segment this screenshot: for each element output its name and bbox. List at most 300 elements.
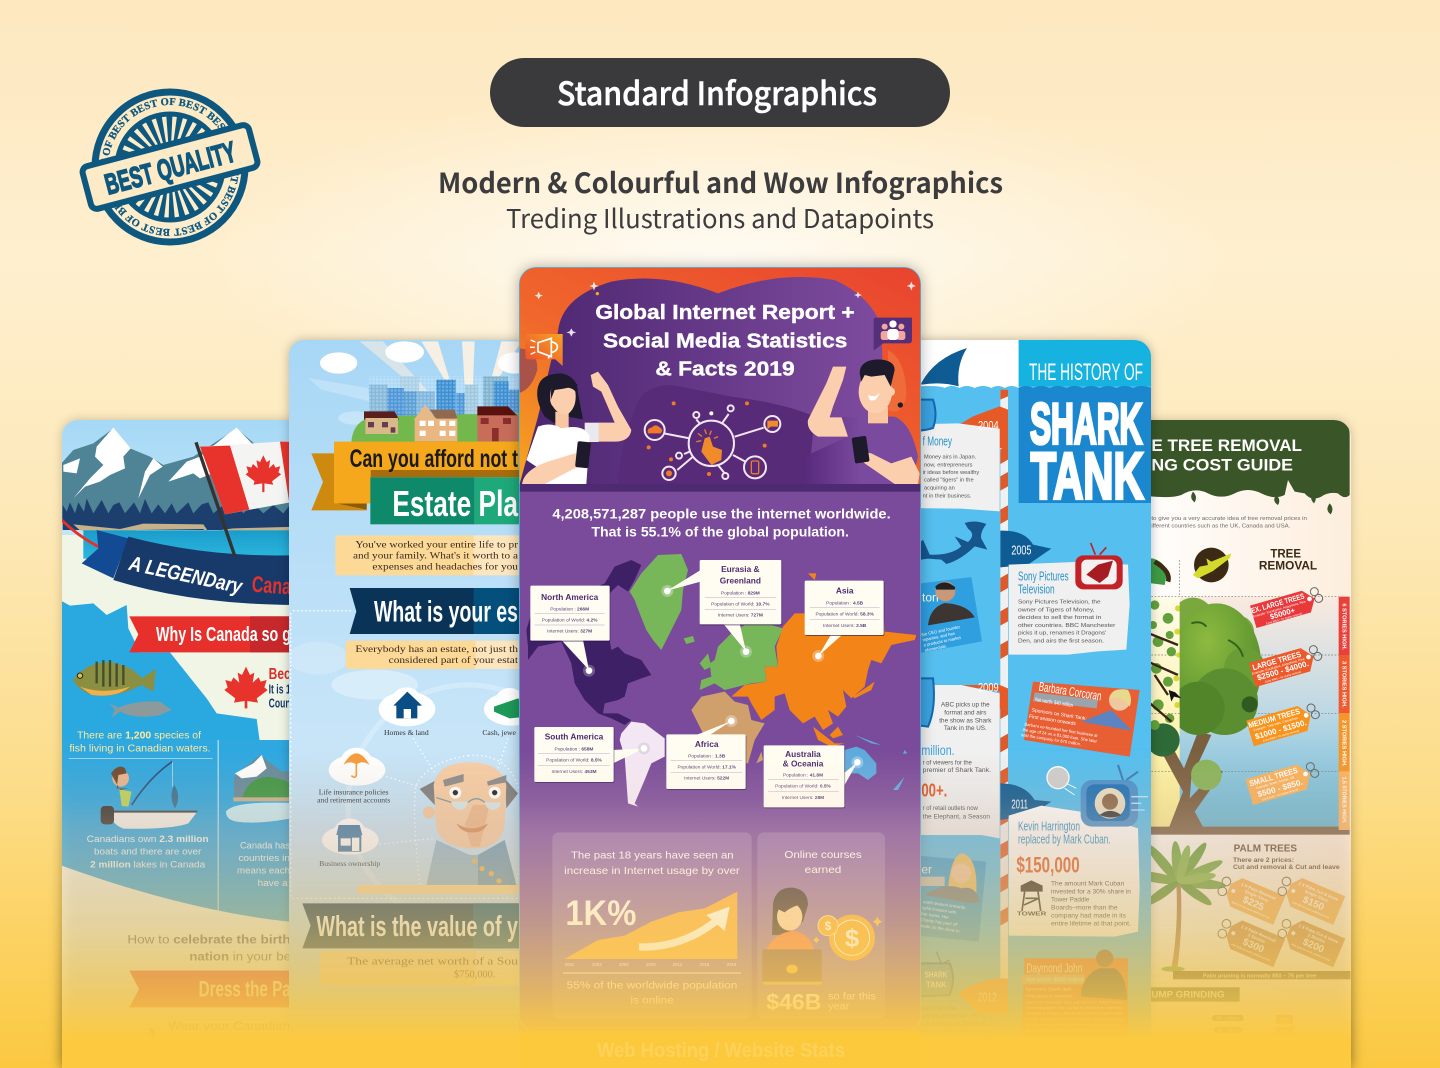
water lower section — [60, 740, 300, 923]
price tag: palm 300: 1 X Palm Removal — [1240, 924, 1277, 943]
text: intro: to give you a very accurate idea of tree removal prices in — [1151, 516, 1307, 522]
price tag: palm 200: 2 Stories — [1307, 932, 1326, 944]
text: palm trees heading: Cut and removal & Cut and leave — [1233, 864, 1340, 871]
text: countries: countries in — [238, 853, 290, 863]
callout: australia and oceania: Population of World: 0.5% — [775, 784, 832, 790]
text: internet users: 4,208,571,287 people use the internet worldwide. — [552, 506, 891, 521]
panel: online courses: earned — [805, 865, 842, 876]
text: species: There are 1,200 species of — [77, 730, 201, 741]
milestone: 2012: ed for a Primetime Emmy — [922, 1030, 992, 1036]
card: lara profile — [911, 853, 986, 942]
sky and mountains — [60, 415, 300, 559]
icon: people badge — [874, 318, 912, 351]
text box: intro: expenses and headaches for you — [372, 561, 518, 572]
milestone: 2005: Sony Pictures Television, the — [1018, 599, 1101, 605]
text: because: Coun — [269, 697, 291, 711]
milestone: 2009: r of viewers for the — [923, 760, 973, 766]
price tag: palm 200 — [1274, 914, 1345, 967]
ribbon: estate planning — [370, 477, 528, 524]
milestone: 2011: The amount Mark Cuban — [1051, 882, 1124, 888]
price tag: palm 225 — [1214, 871, 1285, 925]
price tag: extra large trees: Example: Eucalyptus, Angophora, Pine — [1253, 599, 1306, 618]
text box: net worth — [320, 951, 529, 985]
icon: umbrella — [329, 748, 385, 786]
chart: area growth: 2006 — [619, 962, 629, 967]
milestone: 2009: Tank in the US. — [944, 725, 987, 732]
milestone: 2005: other countries. BBC Manchester — [1018, 623, 1115, 629]
diagram: network of icons — [645, 401, 780, 480]
heading: stump grinding — [1138, 987, 1240, 1002]
text: boats: boats and there are over — [94, 846, 201, 856]
milestone: 2009 — [898, 678, 1008, 838]
milestone: 2004: 2004 — [978, 418, 999, 432]
milestone: 2012 — [911, 952, 1008, 1068]
title — [595, 302, 855, 381]
milestone: 2005: 2005 — [1011, 544, 1031, 558]
milestone: 2009: ABC picks up the — [941, 701, 990, 708]
icon: business ownership: Business ownership — [319, 859, 380, 868]
houses — [364, 405, 519, 441]
text: celebrate: How to celebrate the birth — [127, 932, 291, 946]
text: palm trees heading: PALM TREES — [1234, 844, 1298, 855]
panel: online courses: Online courses — [784, 850, 862, 861]
panel: global internet report (center) — [62, 267, 1351, 1068]
callout: australia and oceania: & Oceania — [783, 759, 824, 769]
card: barbara corcoran: Sponsors on Shark Tank: — [1031, 707, 1087, 722]
callout: africa: Internet Users: 522M — [684, 776, 729, 782]
text: celebrate: nation in your be — [189, 950, 291, 964]
milestone: 2005: owner of Tigers of Money, — [1018, 607, 1095, 613]
note: palm pruning: felt. — [1153, 973, 1162, 979]
price tag: palm 150: Add $80 for each additional tree — [1291, 900, 1330, 920]
ribbon: what is the value: What is the value of y — [316, 911, 518, 943]
badge: best quality stamp: BEST QUALITY — [102, 136, 239, 202]
card: barbara corcoran: sold the company for $70 million. — [1021, 732, 1082, 747]
price tag: large trees: Extra $450 + for stump removal — [1265, 670, 1302, 684]
card: daymond john — [1021, 950, 1128, 1035]
text box: everybody has an estate — [346, 641, 528, 669]
card: barbara corcoran: Barbara Corcoran — [1038, 680, 1102, 703]
card: lara profile: ourth season onwards — [923, 899, 966, 910]
text box: everybody has an estate: Everybody has an estate, not just th — [355, 645, 518, 655]
green hill — [351, 413, 521, 443]
callout: north america: Population of World: 4.2% — [542, 617, 598, 623]
illustration: man waving — [803, 359, 920, 484]
price tag: palm 300 — [1214, 914, 1285, 967]
callout: africa: Population : 1.3B — [688, 754, 726, 760]
price tag: medium trees: Example: Tulip oaks, Casuarinas — [1253, 716, 1299, 732]
panel: internet usage growth: The past 18 years have seen an — [571, 851, 734, 862]
legend strip: stories high: 6 STORIES HIGH. — [1340, 603, 1346, 650]
icon: megaphone badge — [525, 334, 563, 366]
price tag: extra large trees: Extra $600 + for stump removal — [1265, 611, 1303, 625]
callout: australia and oceania: Population : 41.8M — [783, 773, 823, 779]
price tag: large trees: $2500 - $4000. — [1256, 659, 1310, 682]
price tag: small trees: SMALL TREES — [1248, 766, 1299, 788]
price tag: palm 225: $225 — [1241, 894, 1266, 913]
card: barbara corcoran: the age of 24 on a $1,000 loan. She later — [1022, 727, 1098, 744]
legend strip: stories high: 1.5 STORIES HIGH. — [1340, 777, 1346, 824]
icon: homes and land — [379, 687, 435, 737]
card: barbara corcoran: First season onwards — [1029, 714, 1077, 727]
banner: a legendary canada — [82, 530, 300, 605]
chart: stump price rows: $450 — [1280, 1017, 1290, 1022]
section band: web hosting stats: Web Hosting / Website Stats — [597, 1040, 845, 1062]
card: daymond john: made by him and his mother. It became a — [1025, 1017, 1123, 1021]
banner: a legendary canada: A LEGENDary — [126, 552, 245, 599]
card: kevin profile: mpanies, and has — [922, 631, 955, 642]
ribbon: why is canada so great — [129, 616, 300, 652]
card: daymond john: company FUBU, which sold hand-sewn hats — [1025, 1012, 1122, 1016]
icon: red tv — [1075, 543, 1123, 589]
price tag: palm 225: Single Story — [1244, 889, 1270, 903]
panel: Canada infographic (left) — [60, 415, 302, 1068]
milestone: 2011: replaced by Mark Cuban. — [1018, 831, 1111, 846]
header base band — [518, 484, 928, 492]
milestone: 2005: Television — [1018, 582, 1055, 596]
title: the history of shark tank — [1019, 338, 1151, 512]
milestone: 2009: format and airs — [944, 709, 986, 716]
illustration: woman with laptop — [762, 888, 822, 985]
milestone: 2012: TANK — [926, 980, 947, 990]
chart: stump price rows: 85 – 100cm — [1217, 1016, 1240, 1021]
chart: stump price rows: $150 — [1280, 1053, 1290, 1058]
price tag: medium trees: $1000 - $1500. — [1254, 718, 1308, 741]
title pill — [490, 58, 950, 127]
milestone: 2004: acquiring an — [924, 485, 955, 491]
stat: 46 billion: year — [828, 1001, 850, 1012]
callout: australia and oceania: Australia — [785, 749, 821, 759]
milestone: 2011 — [1000, 783, 1140, 937]
price tag: palm 300: Add $150 for each additional tree — [1231, 942, 1271, 962]
text: life insurance — [317, 789, 390, 802]
title: the history of shark tank: THE HISTORY OF — [1029, 359, 1143, 386]
card: daymond john: He mortgaged his house to fund the clothing — [1025, 1006, 1122, 1010]
card: daymond john: First season onwards — [1025, 993, 1073, 999]
icon: maple leaf — [224, 667, 268, 708]
milestone: 2005: decides to sell the format in — [1018, 615, 1101, 621]
illustration: big tree — [1138, 598, 1350, 835]
milestone: 2004: ir ideas before wealthy — [923, 470, 979, 476]
milestone: 2009: the show as Shark — [939, 717, 992, 724]
milestone: 2012: becomes the — [922, 1006, 957, 1012]
milestone: 2004: nt in their business. — [923, 493, 972, 499]
callout: eurasia and greenland — [661, 560, 781, 658]
card: barbara corcoran — [1021, 678, 1140, 757]
price tag: large trees: Example: Eucalyptus, Angophora, Pine — [1251, 657, 1305, 676]
callout: eurasia and greenland: Eurasia & — [721, 564, 760, 574]
callout: south america: South America — [545, 732, 604, 742]
card: daymond john: multi-million dollar success from the very start — [1025, 1023, 1123, 1027]
text box: net worth: $750,000. — [454, 969, 495, 980]
price tag: large trees — [1249, 643, 1325, 687]
legend strip: stories high: 3 STORIES HIGH. — [1340, 661, 1346, 708]
callout: asia: Population : 4.5B — [826, 601, 864, 607]
icon: hangers — [118, 1029, 237, 1068]
chart: area growth: 2018 — [727, 962, 737, 967]
milestone: 2011: Boards–more than the — [1051, 906, 1118, 912]
milestone: 2004 — [898, 400, 1008, 511]
title: & Facts 2019 — [655, 359, 795, 381]
callout: africa: Africa — [695, 739, 719, 749]
price tag: palm 225: 1 X Palm Removal — [1240, 882, 1277, 901]
milestone: 2011: $150,000 — [1016, 852, 1080, 877]
legend strip: stories high — [1339, 597, 1350, 830]
price tag: palm 150 — [1274, 871, 1345, 925]
callout: north america: North America — [541, 592, 599, 602]
icon: island — [226, 755, 289, 823]
ribbon: what is the value — [302, 903, 528, 948]
text: because — [269, 668, 289, 708]
callout: asia — [805, 581, 884, 662]
callout: south america: Population : 658M — [555, 747, 593, 753]
price tag: medium trees — [1246, 701, 1323, 746]
icon: business ownership — [319, 818, 380, 868]
illustration: woman waving — [522, 372, 631, 484]
stat: 46 billion: $46B — [766, 990, 821, 1015]
card: barbara corcoran: Barbara co-founded her first business at — [1024, 722, 1099, 738]
milestone: 2011: entire lifetime at that point. — [1051, 922, 1131, 928]
panel: internet usage growth — [552, 832, 752, 1019]
price tag: palm 150: $150 — [1301, 894, 1326, 913]
icon: cash and jewellery: Cash, jewe — [482, 728, 517, 737]
header background — [518, 267, 928, 485]
text: boats: 2 million lakes in Canada — [90, 860, 205, 870]
callout: asia: Asia — [836, 586, 854, 596]
milestone: 2011: company had made in its — [1051, 914, 1126, 920]
card: barbara corcoran: Net worth: $40 million — [1035, 697, 1073, 709]
text: palm trees heading: There are 2 prices: — [1233, 857, 1294, 864]
milestone: 2004: f Money — [923, 434, 952, 448]
panel: internet usage growth: 55% of the worldwide population — [567, 980, 738, 991]
chart: stump price rows — [1212, 1015, 1293, 1060]
price tag: palm 200: Add $100 for each additional tree — [1291, 942, 1331, 962]
legend strip: stories high: 2 STORIES HIGH. — [1340, 720, 1346, 767]
card: kevin profile — [911, 577, 982, 655]
price tag: small trees: Example: Bottle, Acacia, Lilli — [1256, 775, 1295, 790]
milestone: 2009: million. — [921, 742, 955, 758]
icon: fisherman on boat — [101, 761, 197, 829]
milestone: 2011: Tower Paddle — [1051, 898, 1090, 904]
milestone: 2009: premier of Shark Tank. — [923, 768, 991, 774]
milestone: 2004: called "tigers" in the — [924, 478, 974, 484]
callout: eurasia and greenland: Population : 829M — [721, 590, 760, 596]
world map — [526, 554, 916, 807]
price tag: palm 150: 1 X Palm Cut & leave — [1298, 881, 1340, 902]
city skyline — [369, 376, 521, 418]
card: kevin profile: the CEO and founder — [921, 624, 961, 637]
icon: hammerhead shark — [911, 522, 987, 564]
price tag: medium trees: MEDIUM TREES — [1247, 707, 1302, 730]
timeline pole — [1000, 390, 1008, 990]
milestone: 2011: 2011 — [1011, 797, 1028, 811]
price tag: small trees — [1246, 759, 1322, 805]
price tag: palm 200: 1 X Palm Cut & leave — [1298, 923, 1340, 945]
text: internet users: That is 55.1% of the global population. — [591, 525, 849, 540]
section band: web hosting stats — [519, 1032, 921, 1068]
chart: area growth: 2009 — [646, 962, 656, 967]
text: intro — [1151, 516, 1307, 530]
callout: australia and oceania: Internet Users: 28M — [782, 795, 824, 801]
text: tree removal — [1259, 548, 1317, 572]
callout: north america: Population : 266M — [550, 607, 589, 613]
price tag: palm 300: $300 — [1241, 937, 1266, 956]
milestone: 2005: Den, and airs the first season. — [1018, 638, 1104, 644]
ribbon: what is your estate: What is your es — [374, 595, 518, 628]
icon: dollar coins: $ — [825, 919, 832, 933]
card: daymond john: and moved from his house to Seoul. — [1025, 1029, 1122, 1033]
price tag: extra large trees — [1250, 586, 1326, 628]
ribbon: what is your estate — [350, 588, 528, 634]
card: daymond john: Net worth: $250 million — [1026, 978, 1084, 984]
callout: north america: Internet Users: 327M — [547, 628, 592, 634]
note: palm pruning: Palm pruning is normally $50 – 75 per tree — [1203, 973, 1316, 979]
icon: blue tv with portrait — [1047, 765, 1148, 827]
chart: area growth: 2001 — [565, 962, 575, 967]
card: lara profile: ssful investor with — [922, 905, 957, 915]
text: palm trees heading — [1233, 844, 1340, 871]
card: kevin profile: nfomercials. — [924, 643, 947, 653]
price tag: small trees: $500 - $850. — [1256, 778, 1304, 799]
title pill: Standard Infographics — [557, 69, 877, 115]
callout: asia: Internet Users: 2.5B — [823, 623, 867, 629]
text: tree removal: TREE — [1270, 548, 1301, 561]
title: the history of shark tank: SHARK — [1030, 392, 1142, 456]
ribbon: can you afford — [311, 442, 528, 510]
text: because: Bec — [269, 666, 291, 683]
callout: south america — [534, 727, 650, 782]
card: lara profile: Charity has paid off — [920, 917, 959, 927]
text box: intro: You've worked your entire life to pr — [355, 539, 519, 550]
icon: dollar coins — [813, 915, 882, 961]
stat: 46 billion — [766, 990, 876, 1015]
callout: south america: Population of World: 8.5% — [546, 758, 603, 764]
chart: stump price rows: $300 — [1280, 1029, 1290, 1034]
card: lara profile: made on the show to — [919, 923, 961, 934]
panel: tree removal cost guide (right) — [1128, 420, 1351, 1068]
header: tree removal: E TREE REMOVAL — [1151, 436, 1302, 455]
sky panels — [1138, 560, 1340, 830]
callout: north america — [530, 586, 610, 677]
badge: best quality stamp: BEST OF BEST BEST OF BEST BEST OF BEST BEST OF BEST BEST OF BEST — [101, 98, 239, 236]
price tag: extra large trees: EX. LARGE TREES — [1250, 591, 1305, 615]
milestone: 2005: picks it up, renames it Dragons' — [1018, 631, 1106, 637]
white sea top with shark fin — [898, 338, 1019, 388]
chart: area growth: 2015 — [700, 962, 710, 967]
bar — [357, 885, 531, 894]
icon: tower logo: TOWER — [1017, 912, 1047, 918]
title: Global Internet Report + — [595, 302, 855, 324]
milestone: 2012: 2012 — [978, 990, 997, 1005]
icon: fish — [73, 660, 172, 718]
note: palm pruning — [1153, 971, 1350, 979]
chart: stump price rows: 25 – 45cm — [1218, 1052, 1238, 1057]
price tag: large trees: LARGE TREES — [1251, 650, 1303, 672]
chart: stump price rows: $200 — [1280, 1041, 1290, 1046]
ribbon: estate planning: Estate Pla — [392, 483, 519, 524]
chart: area growth: 2012 — [673, 962, 683, 967]
chart: stump price rows: 65 – 85cm — [1218, 1028, 1238, 1033]
text: intro: ifferent countries such as the UK, Canada and USA. — [1151, 524, 1291, 530]
text: tree removal: REMOVAL — [1259, 559, 1317, 572]
subtitle — [438, 162, 1003, 236]
text: species — [69, 730, 211, 755]
text: wear your canadian: Wear your Canadian — [168, 1019, 290, 1033]
milestone: 2011: Kevin Harrington — [1018, 818, 1080, 833]
chart: area growth: 1K% — [565, 894, 636, 933]
price tag: medium trees: Extra $350 + for stump removal — [1262, 729, 1300, 743]
milestone: 2012: ed program for 18- to — [922, 1014, 988, 1020]
text: life insurance: Life insurance policies — [319, 787, 389, 796]
badge: best quality stamp — [80, 88, 260, 246]
ribbon: dress the part — [129, 971, 300, 1007]
text: boats — [87, 836, 208, 868]
icon: dollar coins: $ — [845, 925, 859, 953]
panel: online courses — [757, 832, 885, 1019]
card: kevin profile: e products to market — [923, 635, 962, 648]
card: lara profile: er — [921, 862, 932, 876]
text: countries: means each — [237, 866, 290, 876]
milestone: 2012: SHARK — [925, 970, 948, 980]
callout: eurasia and greenland: Internet Users: 727M — [718, 613, 763, 619]
text: internet users — [552, 506, 891, 540]
icon: canadian flag — [196, 441, 300, 557]
header: tree removal: NG COST GUIDE — [1151, 456, 1293, 475]
ribbon: can you afford: Can you afford not t — [350, 445, 518, 473]
chart: stump price rows: 45 – 65cm — [1218, 1040, 1238, 1045]
callout: eurasia and greenland: Greenland — [720, 575, 761, 585]
text box: everybody has an estate: considered part of your estat — [389, 655, 518, 666]
icon: homes and land: Homes & land — [384, 728, 429, 737]
milestone: 2009: the Elephant, a Season — [923, 814, 990, 820]
chart: area growth: 2003 — [592, 962, 602, 967]
card: daymond john: Daymond John — [1026, 961, 1082, 975]
title: Social Media Statistics — [603, 330, 847, 352]
icon: chainsaw — [1138, 548, 1231, 585]
price tag: palm 200: $200 — [1301, 937, 1326, 956]
text: species: fish living in Canadian waters. — [69, 744, 211, 755]
text: countries — [238, 842, 289, 886]
milestone: 2004: now, entrepreneurs — [924, 462, 973, 468]
price tag: palm 225: Add $110 for each additional tree — [1231, 900, 1271, 920]
clouds — [288, 341, 531, 700]
callout: eurasia and greenland: Population of World: 10.7% — [711, 601, 770, 607]
fade overlay across cards — [62, 750, 1351, 1068]
header: tree removal — [1128, 420, 1350, 514]
text: countries: have a — [258, 878, 288, 888]
icon: cash and jewellery — [482, 688, 519, 736]
ribbon: why is canada so great: Why Is Canada so g — [156, 624, 291, 646]
callout: africa: Population of World: 17.1% — [677, 764, 737, 770]
panel: estate planning infographic — [284, 334, 519, 1026]
text: celebrate — [128, 934, 289, 963]
card: daymond john: Daymond's business, fubu was started in John's home. — [1025, 1000, 1122, 1004]
callout: south america: Internet Users: 453M — [551, 769, 597, 775]
milestone: 2004: Money airs in Japan. — [924, 454, 977, 460]
icon: tower logo — [1017, 880, 1047, 918]
chart: area growth — [565, 892, 737, 967]
milestone: 2012: viewers in its timeslot. It — [922, 1022, 994, 1028]
card: lara profile: her name. Her — [921, 911, 950, 920]
illustration: old man with glasses — [414, 755, 522, 885]
text: life insurance: and retirement accounts — [317, 795, 390, 804]
title: the history of shark tank: TANK — [1031, 438, 1144, 512]
price tag: small trees: Extra $150 + for stump removal — [1262, 787, 1299, 801]
milestone: 2005 — [1000, 531, 1130, 655]
subtitle: Treding Illustrations and Datapoints — [506, 199, 934, 236]
water map shape — [62, 601, 260, 740]
sun rays — [308, 341, 521, 401]
